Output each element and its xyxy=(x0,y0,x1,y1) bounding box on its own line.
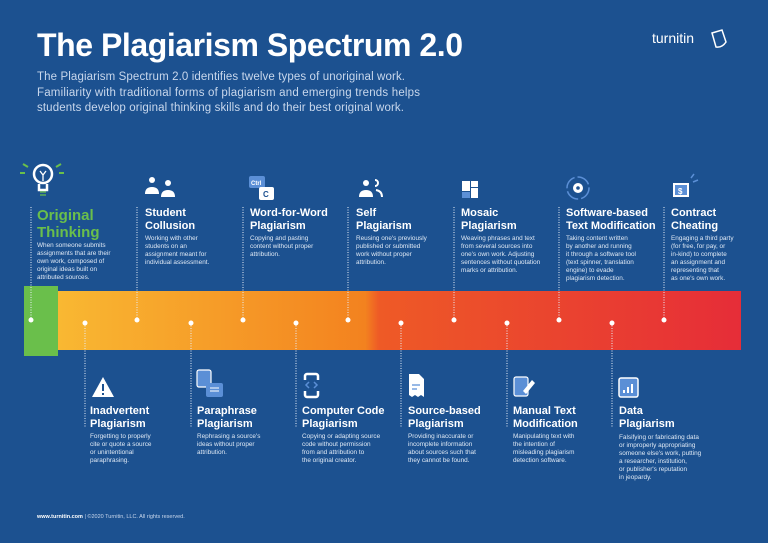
item: Manual Text Modification: misleading plagiarism xyxy=(513,449,574,456)
item: Inadvertent Plagiarism xyxy=(82,320,152,464)
item: Data Plagiarism: Data xyxy=(619,405,644,417)
item: Paraphrase Plagiarism xyxy=(188,320,260,456)
item: Self Plagiarism xyxy=(346,180,428,322)
logo: turnitin: turnitin xyxy=(652,30,694,46)
item: Source-based Plagiarism: about sources such that xyxy=(408,449,476,456)
item: Data Plagiarism: someone else's work, putting xyxy=(619,450,702,457)
item: Word-for-Word Plagiarism: Word-for-Word xyxy=(250,207,328,219)
item: Data Plagiarism: or publisher's reputation xyxy=(619,466,687,473)
item: Self Plagiarism: attribution. xyxy=(356,259,386,266)
item: Contract Cheating: as one's own work. xyxy=(671,275,725,282)
item: Data Plagiarism: Plagiarism xyxy=(619,418,675,430)
item: Paraphrase Plagiarism: ideas without proper xyxy=(197,441,255,448)
item: Contract Cheating: an assignment and xyxy=(671,259,725,266)
item: Paraphrase Plagiarism: attribution. xyxy=(197,449,227,456)
item: Computer Code Plagiarism: the original creator. xyxy=(302,457,357,464)
item: Data Plagiarism: or improperly appropriating xyxy=(619,442,696,449)
item: Software-based Text Modification: (text spinner, translation xyxy=(566,259,634,266)
item: Contract Cheating: Engaging a third party xyxy=(671,235,734,242)
item: Student Collusion: individual assessment. xyxy=(145,259,210,266)
item: Contract Cheating xyxy=(662,174,734,322)
item: Computer Code Plagiarism xyxy=(294,320,384,464)
item: Mosaic Plagiarism: marks or attribution. xyxy=(461,267,518,274)
item: Word-for-Word Plagiarism: attribution. xyxy=(250,251,280,258)
item: Manual Text Modification xyxy=(504,320,578,464)
item: Data Plagiarism: in jeopardy. xyxy=(619,474,652,481)
item: Contract Cheating: in-kind) to complete xyxy=(671,251,727,258)
item: Computer Code Plagiarism: Copying or adapting source xyxy=(302,433,381,440)
item: Original Thinking: Thinking xyxy=(37,224,100,241)
item: Word-for-Word Plagiarism: Plagiarism xyxy=(250,220,306,232)
item: Inadvertent Plagiarism: Forgetting to properly xyxy=(90,433,152,440)
item: Data Plagiarism xyxy=(610,320,702,481)
item: Contract Cheating: representing that xyxy=(671,267,719,274)
item: Student Collusion: students on an xyxy=(145,243,187,250)
item: Word-for-Word Plagiarism: C xyxy=(263,190,269,199)
item: Mosaic Plagiarism xyxy=(452,181,541,322)
item: Student Collusion: Student xyxy=(145,207,186,219)
item: Manual Text Modification: Manipulating text with xyxy=(513,433,575,440)
item: Software-based Text Modification xyxy=(556,177,656,322)
item: Self Plagiarism: work without proper xyxy=(355,251,413,258)
item: Data Plagiarism: a researcher, institution, xyxy=(619,458,687,465)
item: Paraphrase Plagiarism: Plagiarism xyxy=(197,418,253,430)
item: Contract Cheating: $ xyxy=(678,187,683,196)
item: Original Thinking: attributed sources. xyxy=(37,274,90,281)
item: Student Collusion: Collusion xyxy=(145,220,195,232)
item: Paraphrase Plagiarism: Paraphrase xyxy=(197,405,257,417)
item: Mosaic Plagiarism: sentences without quotation xyxy=(461,259,541,266)
item: Student Collusion xyxy=(134,177,210,322)
item: Word-for-Word Plagiarism: content without proper xyxy=(250,243,314,250)
item: Original Thinking: assignments that are their xyxy=(37,250,111,257)
item: Computer Code Plagiarism: Computer Code xyxy=(302,405,384,417)
item: Source-based Plagiarism: Plagiarism xyxy=(408,418,464,430)
item: Original Thinking: original ideas built on xyxy=(37,266,97,273)
footer: www.turnitin.com | ©2020 Turnitin, LLC. All rights reserved. xyxy=(36,513,185,520)
item: Software-based Text Modification: plagiarism detection. xyxy=(566,275,625,282)
item: Computer Code Plagiarism: Plagiarism xyxy=(302,418,358,430)
item: Word-for-Word Plagiarism xyxy=(240,176,328,322)
item: Contract Cheating: (for free, for pay, or xyxy=(671,243,726,250)
subtitle: students develop original thinking skills and do their best original work. xyxy=(37,102,404,114)
item: Mosaic Plagiarism: from several sources into xyxy=(461,243,533,250)
item: Mosaic Plagiarism: one's own work. Adjusting xyxy=(461,251,535,258)
spectrum bar xyxy=(24,286,741,356)
item: Manual Text Modification: the intention of xyxy=(513,441,555,448)
item: Original Thinking: Original xyxy=(37,207,94,224)
item: Self Plagiarism: published or submitted xyxy=(356,243,421,250)
item: Word-for-Word Plagiarism: Ctrl xyxy=(251,181,262,187)
item: Software-based Text Modification: it through a software tool xyxy=(566,251,636,258)
item: Source-based Plagiarism xyxy=(398,320,481,464)
item: Source-based Plagiarism: incomplete information xyxy=(408,441,473,448)
subtitle xyxy=(37,71,420,114)
subtitle: The Plagiarism Spectrum 2.0 identifies twelve types of unoriginal work. xyxy=(37,71,405,83)
item: Computer Code Plagiarism: code without permission xyxy=(302,441,371,448)
item: Contract Cheating: Contract xyxy=(671,207,717,219)
item: Mosaic Plagiarism: Plagiarism xyxy=(461,220,517,232)
item: Original Thinking xyxy=(20,164,111,322)
item: Software-based Text Modification: Software-based xyxy=(566,207,648,219)
item: Inadvertent Plagiarism: cite or quote a source xyxy=(90,441,152,448)
item: Mosaic Plagiarism: Weaving phrases and text xyxy=(461,235,535,242)
subtitle: Familiarity with traditional forms of plagiarism and emerging trends helps xyxy=(37,87,420,99)
item: Student Collusion: Working with other xyxy=(145,235,199,242)
item: Original Thinking: When someone submits xyxy=(37,242,106,249)
item: Student Collusion: assignment meant for xyxy=(145,251,207,258)
item: Manual Text Modification: detection software. xyxy=(513,457,567,464)
item: Self Plagiarism: Reusing one's previously xyxy=(356,235,428,242)
title: The Plagiarism Spectrum 2.0 xyxy=(37,27,463,63)
item: Manual Text Modification: Manual Text xyxy=(513,405,576,417)
item: Paraphrase Plagiarism: Rephrasing a source's xyxy=(197,433,260,440)
item: Software-based Text Modification: engine) to evade xyxy=(566,267,614,274)
item: Source-based Plagiarism: Source-based xyxy=(408,405,481,417)
item: Software-based Text Modification: by another and running xyxy=(566,243,632,250)
item: Inadvertent Plagiarism: or unintentional xyxy=(90,449,134,456)
item: Self Plagiarism: Self xyxy=(356,207,377,219)
item: Original Thinking: own work, composed of xyxy=(37,258,104,265)
item: Inadvertent Plagiarism: Inadvertent xyxy=(90,405,150,417)
item: Contract Cheating: Cheating xyxy=(671,220,718,232)
item: Manual Text Modification: Modification xyxy=(513,418,578,430)
item: Computer Code Plagiarism: from and attribution to xyxy=(302,449,365,456)
item: Source-based Plagiarism: they cannot be found. xyxy=(408,457,470,464)
item: Software-based Text Modification: Taking content written xyxy=(566,235,628,242)
item: Software-based Text Modification: Text Modification xyxy=(566,220,656,232)
item: Mosaic Plagiarism: Mosaic xyxy=(461,207,498,219)
item: Word-for-Word Plagiarism: Copying and pasting xyxy=(250,235,309,242)
item: Inadvertent Plagiarism: paraphrasing. xyxy=(90,457,129,464)
logo: turnitin xyxy=(652,30,726,47)
item: Source-based Plagiarism: Providing inaccurate or xyxy=(408,433,474,440)
item: Self Plagiarism: Plagiarism xyxy=(356,220,412,232)
item: Inadvertent Plagiarism: Plagiarism xyxy=(90,418,146,430)
item: Data Plagiarism: Falsifying or fabricating data xyxy=(619,434,699,441)
